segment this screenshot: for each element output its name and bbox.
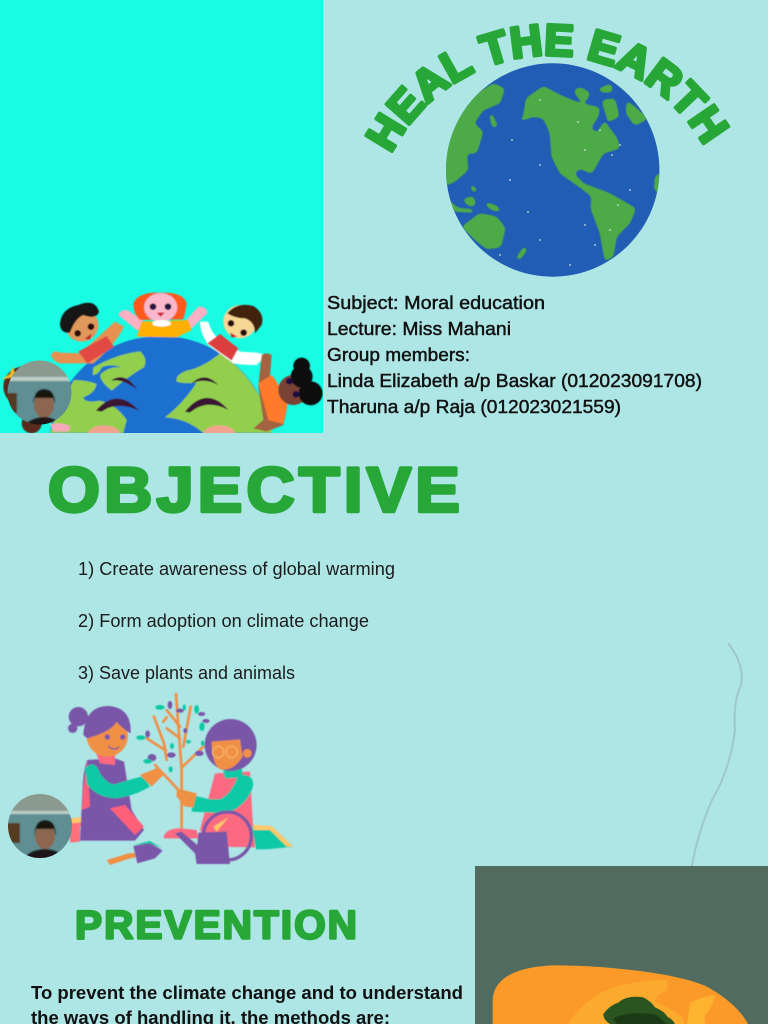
text block: subject and group members xyxy=(327,293,702,417)
illustration: children around smiling earth xyxy=(2,292,323,433)
thin curved line xyxy=(692,643,742,866)
heading: prevention: PREVENTION xyxy=(75,904,359,948)
illustration: children planting a tree xyxy=(68,694,293,865)
text block: objectives list xyxy=(78,559,395,683)
curved heading: HEAL THE EARTH xyxy=(364,22,730,154)
panel: dark green with sunset tree xyxy=(475,866,768,1024)
girl on far right xyxy=(253,353,323,432)
watering can xyxy=(175,812,251,864)
girl kneeling xyxy=(68,706,163,843)
panel: cyan illustration panel xyxy=(0,0,323,433)
text block: subject and group members: Group members: xyxy=(327,345,470,365)
text block: subject and group members: Linda Elizabeth a/p Baskar (012023091708) xyxy=(327,371,702,391)
orange blob xyxy=(493,965,749,1024)
webcam portrait: bottom xyxy=(8,794,72,858)
sapling xyxy=(147,694,203,827)
girl in yellow dress xyxy=(118,293,207,337)
globe xyxy=(440,60,665,280)
sapling leaves xyxy=(136,701,210,772)
smiling earth xyxy=(49,336,273,559)
sunlight patch xyxy=(567,980,684,1024)
boy kneeling xyxy=(177,719,293,849)
title: heal the earth xyxy=(364,22,730,277)
soil mound xyxy=(163,828,198,838)
boy in white and red xyxy=(200,305,267,365)
heading: objective: OBJECTIVE xyxy=(48,456,464,526)
text block: prevention intro: To prevent the climate change and to understand xyxy=(31,983,463,1003)
text block: objectives list: 2) Form adoption on climate change xyxy=(78,611,369,631)
text block: objectives list: 1) Create awareness of global warming xyxy=(78,559,395,579)
text block: subject and group members: Subject: Moral education xyxy=(327,293,545,313)
text block: subject and group members: Tharuna a/p Raja (012023021559) xyxy=(327,397,621,417)
text block: objectives list: 3) Save plants and animals xyxy=(78,663,295,683)
boy in red shirt xyxy=(51,303,124,363)
tree xyxy=(603,997,675,1024)
text block: prevention intro xyxy=(31,983,463,1024)
girl at far left xyxy=(2,367,43,433)
trowel xyxy=(107,841,163,865)
webcam portrait: top xyxy=(8,360,72,424)
text block: subject and group members: Lecture: Miss Mahani xyxy=(327,319,511,339)
